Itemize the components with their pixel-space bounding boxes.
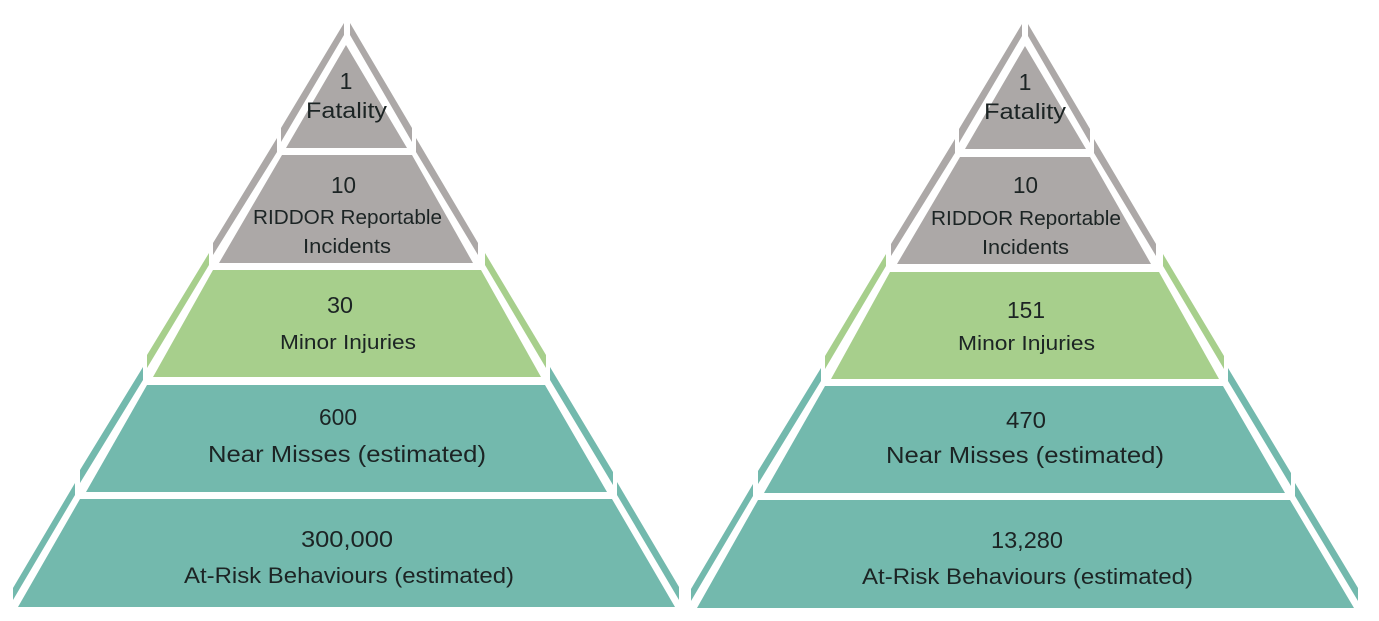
tier: near misses	[758, 368, 1291, 493]
tier: RIDDOR reportable incidents	[891, 139, 1156, 264]
right pyramid	[691, 24, 1358, 608]
tier: RIDDOR reportable incidents: RIDDOR Reportable	[931, 208, 1121, 230]
tier: near misses: Near Misses (estimated)	[208, 441, 486, 467]
tier: at-risk behaviours	[13, 482, 679, 607]
tier: near misses: Near Misses (estimated)	[886, 442, 1164, 468]
tier: at-risk behaviours	[691, 483, 1358, 608]
tier: 1 fatality: 1	[340, 68, 352, 94]
tier: at-risk behaviours: At-Risk Behaviours (estimated)	[862, 564, 1193, 589]
tier: minor injuries	[147, 253, 546, 377]
tier: RIDDOR reportable incidents: RIDDOR Reportable	[253, 207, 442, 229]
tier: 1 fatality: 1	[1019, 69, 1031, 95]
tier: near misses: 470	[1006, 407, 1046, 433]
tier: at-risk behaviours: 300,000	[301, 526, 393, 552]
tier: RIDDOR reportable incidents: 10	[1013, 172, 1038, 198]
tier: minor injuries: 30	[327, 292, 353, 318]
tier: at-risk behaviours: At-Risk Behaviours (estimated)	[184, 563, 514, 588]
tier: minor injuries	[825, 254, 1224, 379]
tier: near misses: 600	[319, 404, 357, 430]
tier: 1 fatality	[281, 23, 412, 148]
tier: minor injuries: Minor Injuries	[958, 333, 1095, 355]
tier: near misses	[80, 367, 613, 492]
tier: 1 fatality: Fatality	[306, 98, 387, 123]
tier: 1 fatality	[959, 24, 1090, 149]
tier: at-risk behaviours: 13,280	[991, 527, 1063, 553]
tier: minor injuries: Minor Injuries	[280, 332, 416, 354]
tier: RIDDOR reportable incidents	[213, 138, 478, 263]
tier: RIDDOR reportable incidents: 10	[331, 172, 356, 198]
tier: RIDDOR reportable incidents: Incidents	[303, 236, 391, 258]
tier: minor injuries: 151	[1007, 297, 1045, 323]
left pyramid	[13, 23, 679, 607]
tier: RIDDOR reportable incidents: Incidents	[982, 237, 1069, 259]
tier: 1 fatality: Fatality	[984, 99, 1066, 124]
